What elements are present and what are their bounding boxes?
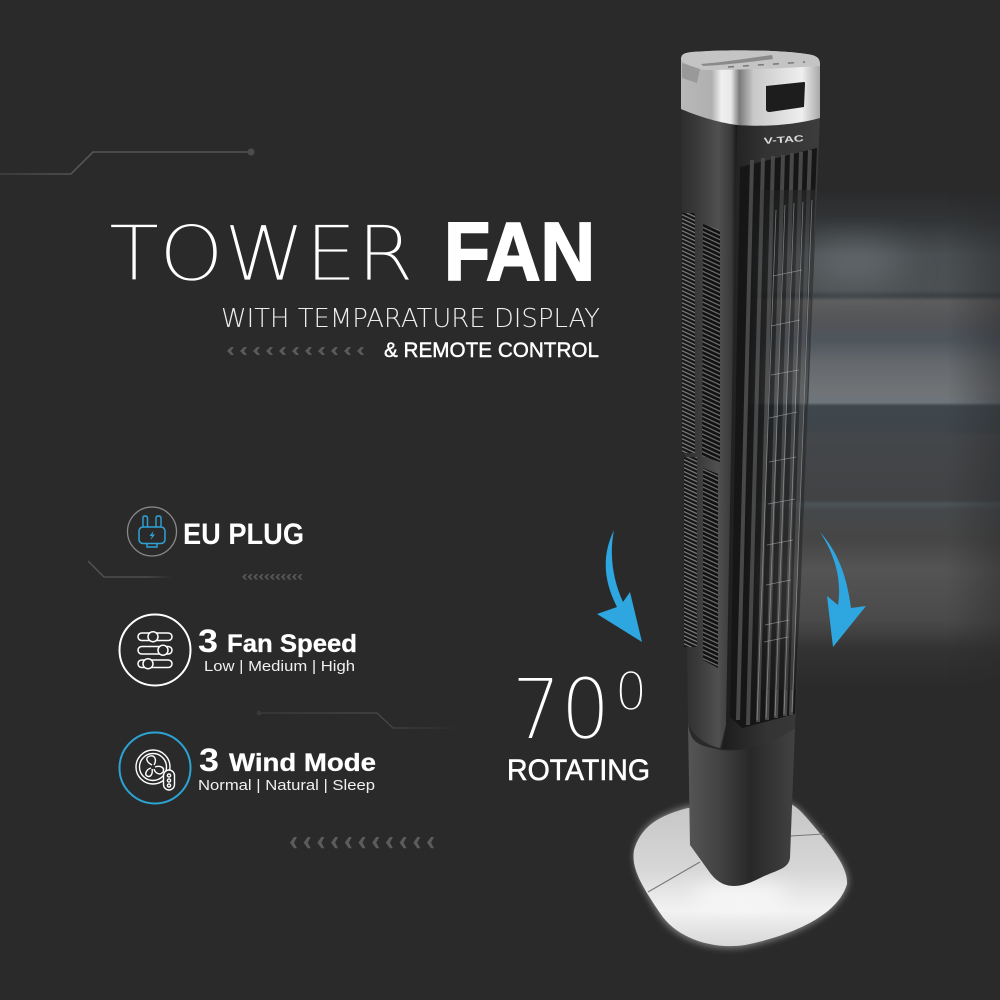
fan lower body (688, 722, 795, 886)
front grille (730, 148, 817, 728)
chevron row under title (227, 347, 364, 355)
heading: 3 wind mode: 3 (199, 742, 219, 778)
tower fan product (633, 50, 848, 948)
decorative circuit line: top (0, 148, 254, 174)
icon: fan with remote (120, 732, 190, 804)
chevron row bottom (290, 837, 434, 848)
small chevron row (242, 574, 302, 580)
feature: wind mode (120, 732, 376, 804)
wind options: Normal | Natural | Sleep (198, 778, 375, 794)
heading: 3 fan speed: Fan Speed (227, 630, 357, 658)
rotating label: ROTATING (507, 754, 650, 787)
rotation angle: 70 (512, 661, 610, 758)
arrow: left (597, 530, 642, 642)
icon: plug (128, 507, 176, 556)
fan base (633, 803, 848, 948)
subtitle: with temparature display: WITH TEMPARATURE DISPLAY (221, 304, 600, 334)
heading: 3 wind mode (199, 742, 376, 778)
arrow: right (820, 532, 866, 647)
70 degrees rotating callout (507, 661, 650, 787)
side vents (682, 213, 720, 668)
wind blur effect (798, 212, 1000, 650)
feature: EU plug (128, 507, 304, 556)
feature: fan speed (120, 614, 357, 686)
subtitle: remote control: & REMOTE CONTROL (384, 338, 599, 362)
brand logo: V-TAC (763, 133, 805, 146)
heading: 3 fan speed (198, 623, 357, 659)
title (109, 205, 595, 298)
decorative circuit line: middle left (88, 561, 172, 577)
decorative circuit line: middle right (257, 711, 460, 728)
heading: 3 fan speed: 3 (198, 623, 218, 659)
fan front face (722, 116, 820, 750)
fan left face (681, 108, 738, 748)
title: TOWER (109, 209, 414, 298)
icon: sliders (120, 614, 190, 686)
title: FAN (444, 205, 595, 298)
label: EU plug: EU PLUG (183, 518, 304, 551)
speed options: Low | Medium | High (204, 659, 355, 675)
display window (766, 82, 805, 112)
heading: 3 wind mode: Wind Mode (229, 749, 376, 777)
rotation angle: 0 (615, 662, 647, 722)
fan top control head (681, 50, 820, 126)
wind haze over grille (753, 190, 815, 690)
